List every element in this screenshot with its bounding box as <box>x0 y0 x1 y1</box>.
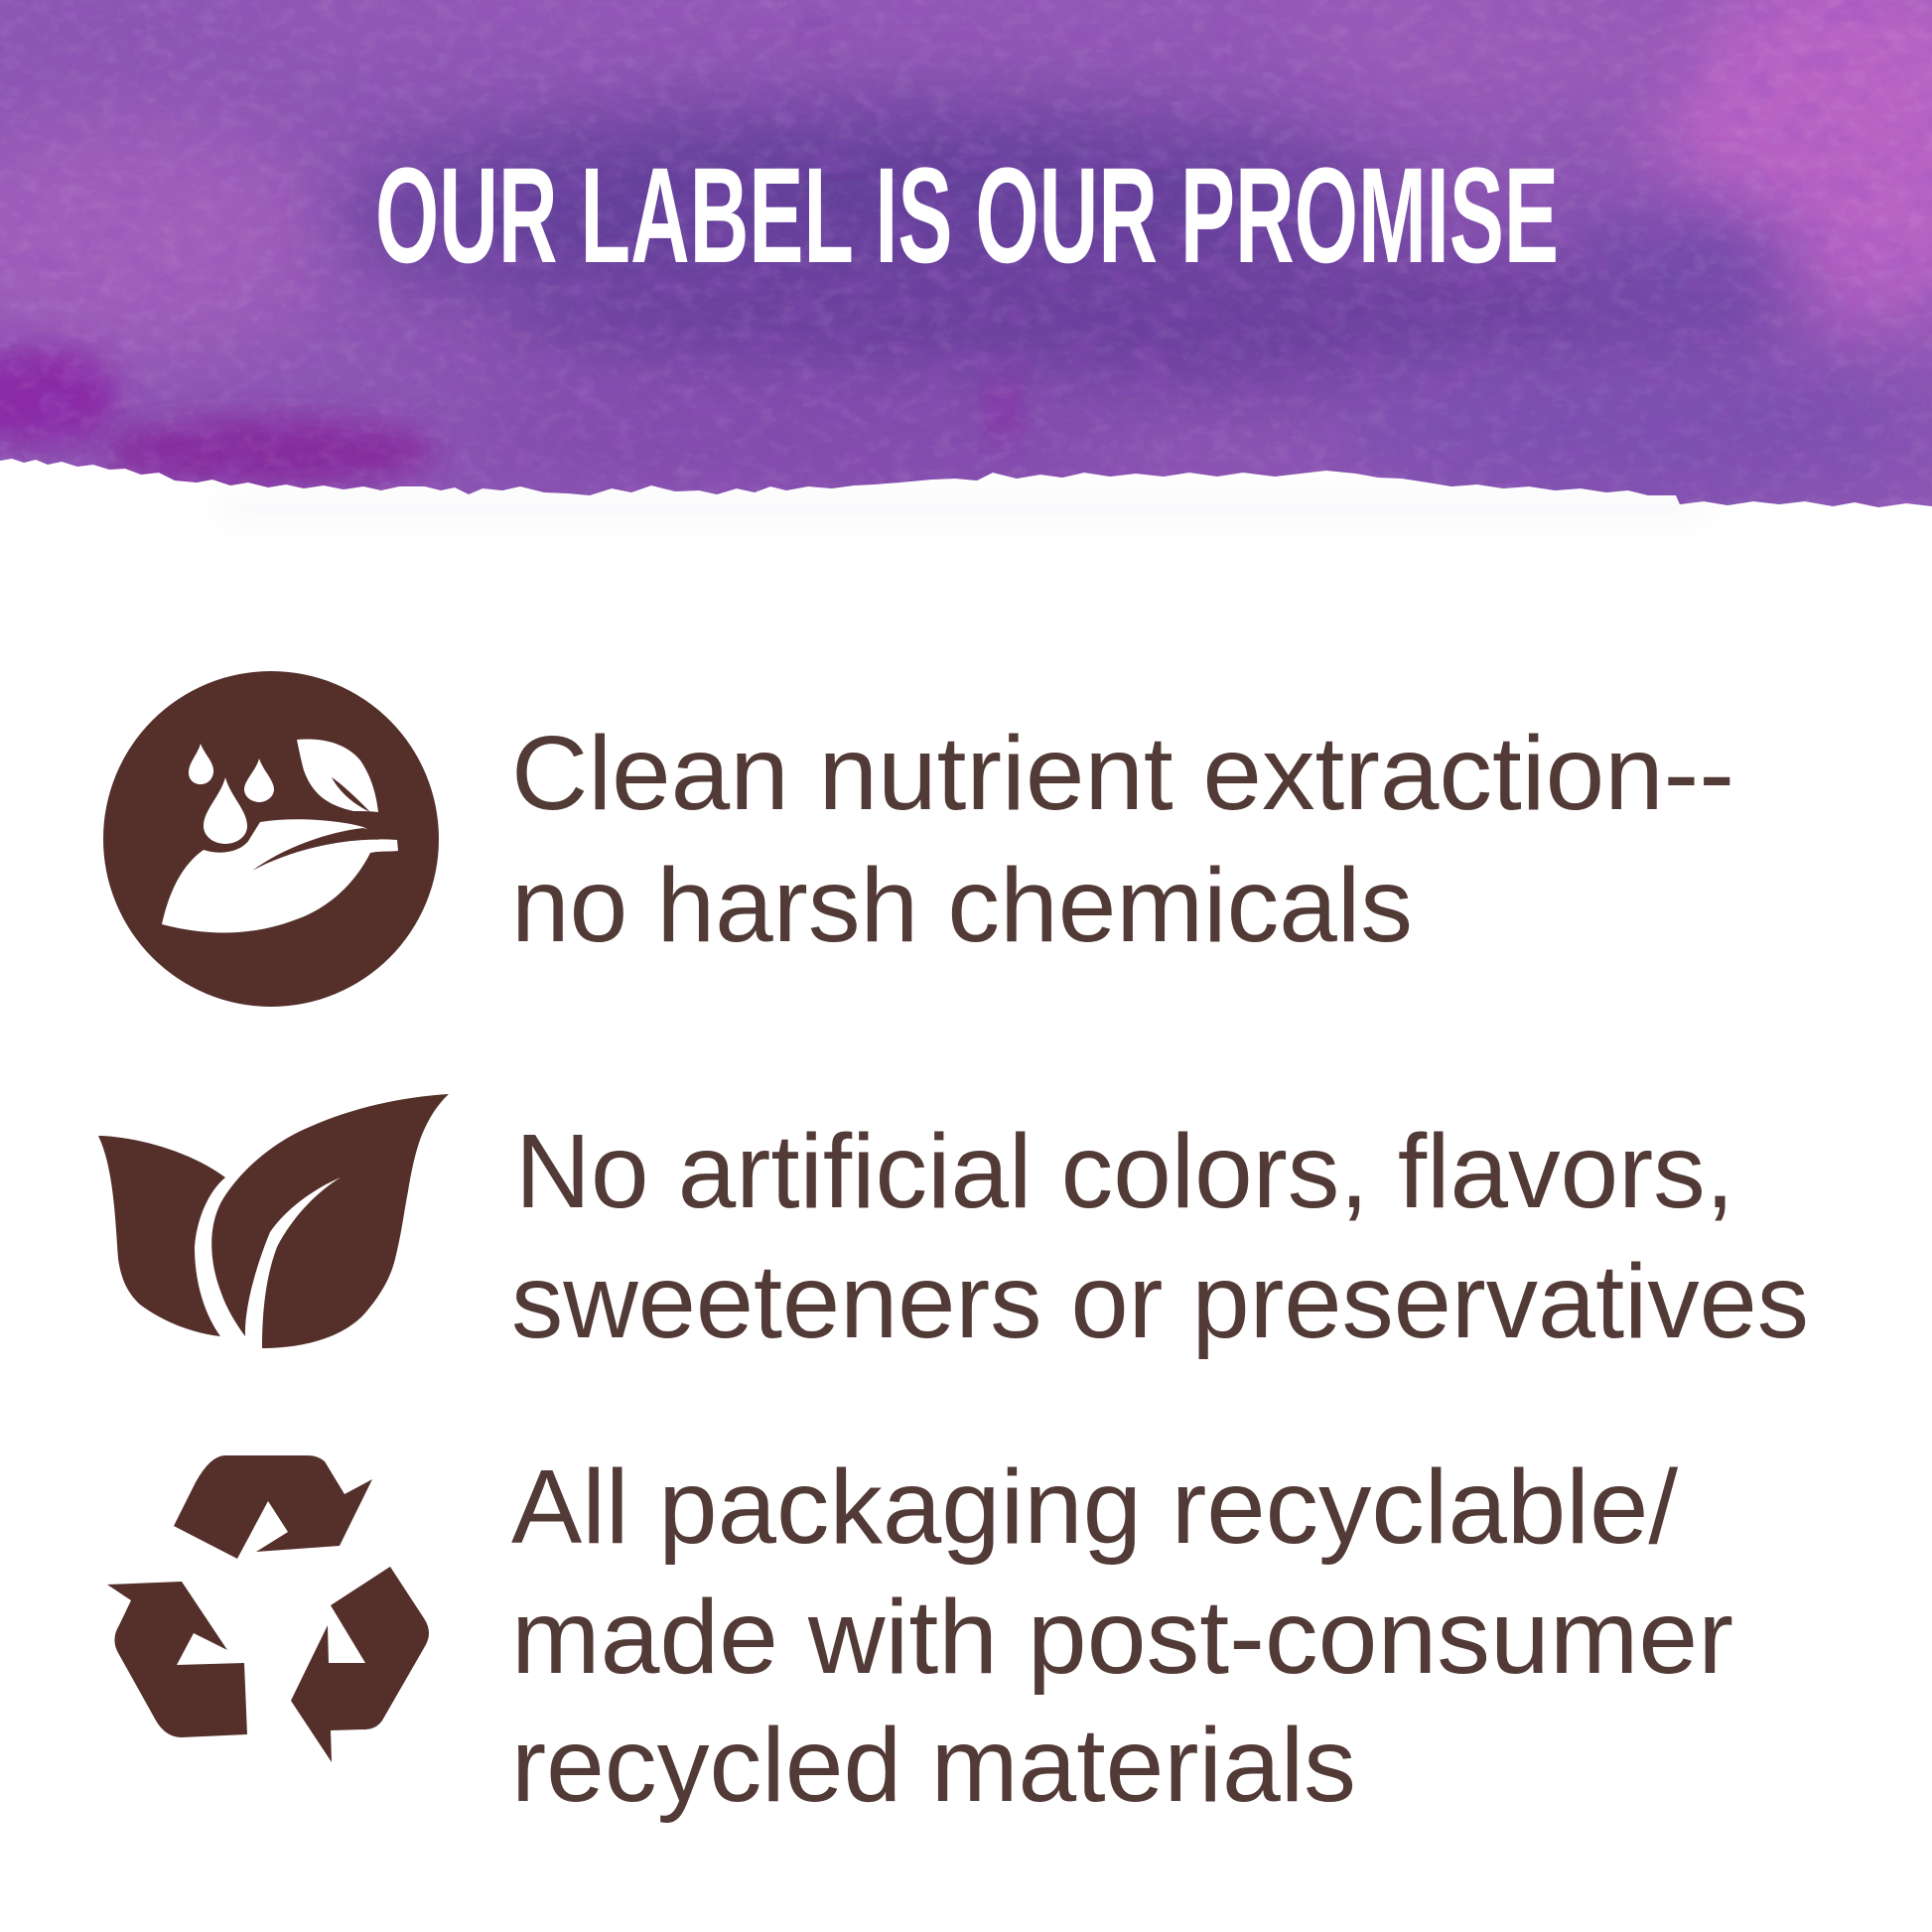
text block: no artificial ingredients: sweeteners or preservatives <box>511 1243 1809 1360</box>
panel: purple watercolor banner <box>0 0 1932 516</box>
text block: recyclable packaging: recycled materials <box>511 1707 1356 1824</box>
text block: no artificial ingredients: No artificial colors, flavors, <box>515 1113 1734 1230</box>
icon: two leaves <box>98 1094 449 1348</box>
icon: leaf with water drops in circle <box>103 671 439 1007</box>
text block: clean nutrient extraction: Clean nutrient extraction-- <box>511 715 1734 832</box>
icon: recycling arrows <box>107 1455 429 1762</box>
soft shadow under the banner <box>218 498 1708 520</box>
text block: recyclable packaging: All packaging recyclable/ <box>511 1449 1679 1566</box>
text block: no artificial ingredients <box>511 1113 1809 1360</box>
text block: clean nutrient extraction <box>511 715 1734 964</box>
text block: recyclable packaging <box>511 1449 1733 1824</box>
text block: clean nutrient extraction: no harsh chemicals <box>511 847 1413 964</box>
text block: recyclable packaging: made with post-consumer <box>511 1579 1733 1696</box>
